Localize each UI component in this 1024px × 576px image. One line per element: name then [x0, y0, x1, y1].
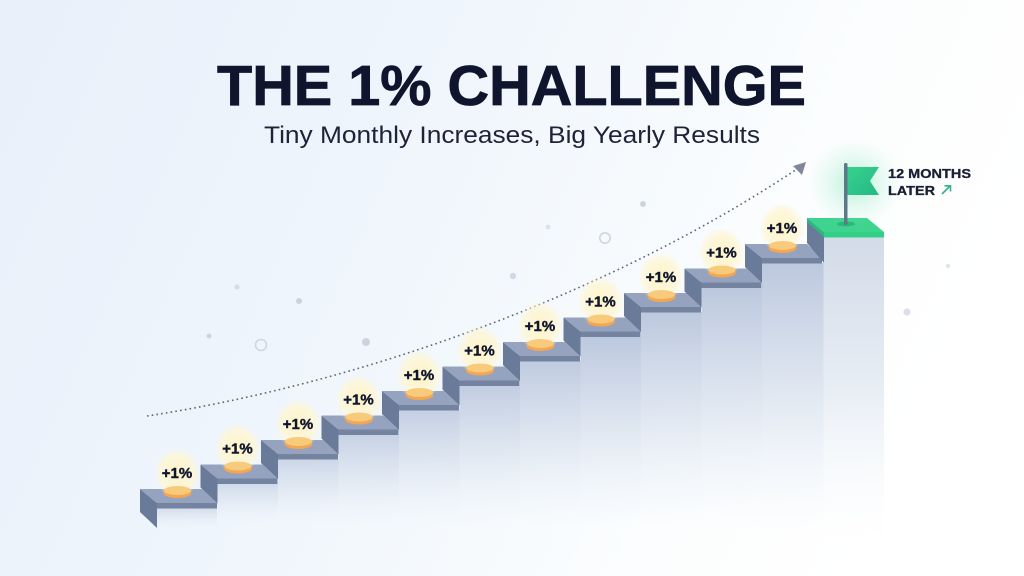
step 1 — [140, 448, 217, 528]
step 5 — [382, 350, 459, 430]
callout: 12 months later — [888, 166, 971, 198]
callout: 12 months later: LATER — [888, 183, 936, 198]
callout: 12 months later: 12 MONTHS — [888, 166, 971, 181]
background dots and rings — [206, 201, 950, 350]
step 8: +1% — [585, 294, 616, 310]
step 1: +1% — [162, 465, 192, 482]
step 3: +1% — [283, 416, 313, 433]
subtitle: Tiny Monthly Increases, Big Yearly Results — [264, 122, 760, 149]
step 9: +1% — [646, 269, 676, 286]
step 3 — [261, 399, 338, 479]
step 2 — [200, 424, 278, 504]
dotted growth arrow — [147, 162, 806, 416]
title: THE 1% CHALLENGE — [217, 54, 806, 118]
step 7 — [503, 301, 580, 381]
step 7: +1% — [525, 318, 555, 335]
step 11 — [745, 203, 822, 283]
step 8 — [564, 276, 640, 356]
icon: up arrow — [942, 186, 950, 194]
step 4: +1% — [343, 392, 374, 408]
step 6: +1% — [464, 342, 495, 360]
final green platform — [807, 218, 884, 263]
step 11: +1% — [767, 220, 797, 237]
icon: green flag — [809, 139, 901, 227]
step 10 — [684, 228, 762, 308]
stair columns — [157, 237, 884, 547]
step 4 — [322, 374, 398, 454]
step 9 — [624, 252, 701, 332]
step 2: +1% — [222, 440, 253, 458]
step 6 — [442, 326, 520, 406]
step 5: +1% — [404, 367, 434, 384]
step 10: +1% — [706, 244, 737, 262]
